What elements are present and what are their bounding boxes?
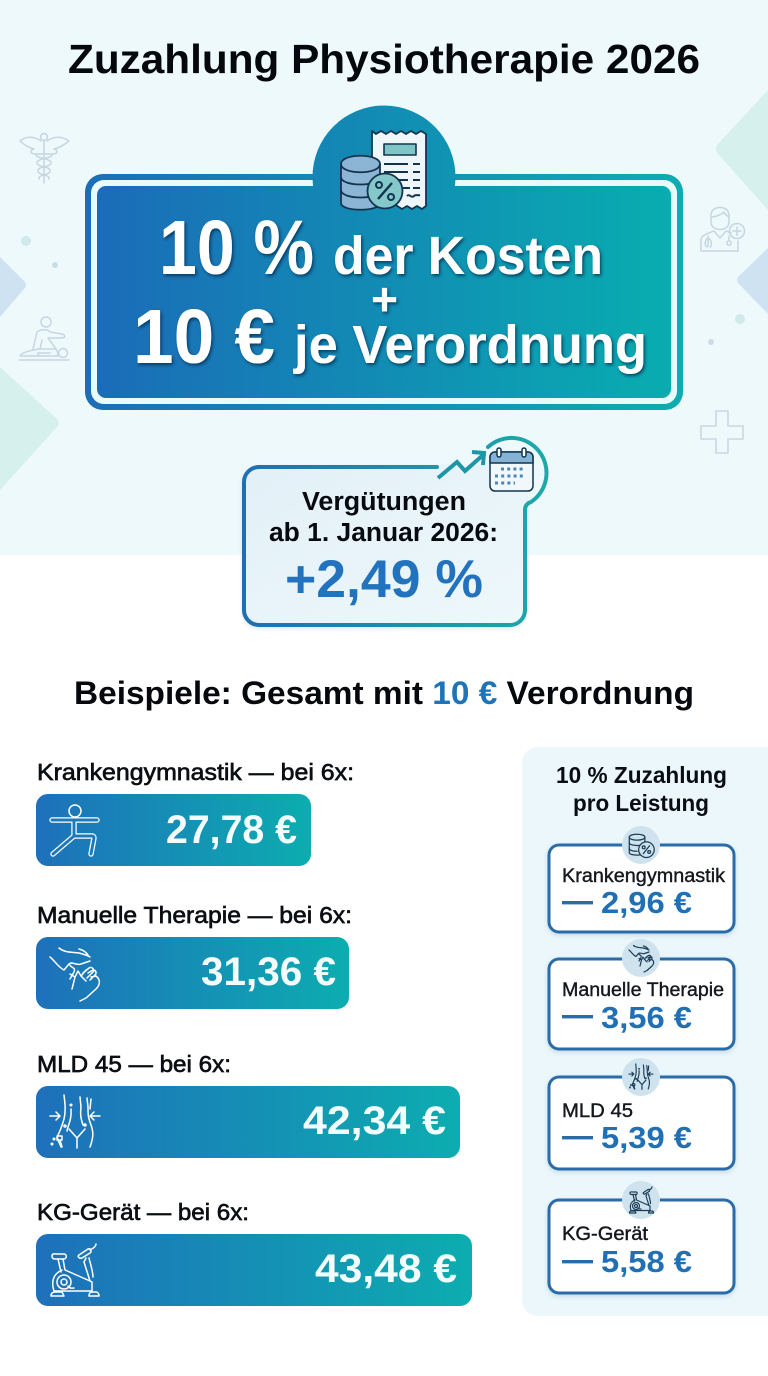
card: Krankengymnastik: Krankengymnastik <box>562 866 726 887</box>
icon: exercise bike <box>51 1244 99 1296</box>
hero text: 10 % <box>159 205 314 291</box>
row: Krankengymnastik: 27,78 € <box>166 808 297 852</box>
icon: coins <box>622 826 660 864</box>
callout: Vergütungen: +2,49 % <box>285 550 483 609</box>
card: MLD 45: MLD 45 <box>562 1101 633 1122</box>
title: Zuzahlung Physiotherapie 2026 <box>68 36 700 82</box>
callout: Vergütungen: ab 1. Januar 2026: <box>269 519 498 547</box>
card: KG-Gerät: 5,58 € <box>601 1244 692 1279</box>
card: KG-Gerät: KG-Gerät <box>562 1224 649 1245</box>
panel heading: pro Leistung <box>573 790 709 816</box>
row: Manuelle Therapie <box>36 902 352 1009</box>
card: Krankengymnastik <box>549 826 734 932</box>
row: Manuelle Therapie: 31,36 € <box>201 950 336 994</box>
hero text: + <box>371 273 398 325</box>
card: KG-Gerät <box>549 1181 734 1293</box>
icon: rising arrow <box>438 452 484 478</box>
card: MLD 45: 5,39 € <box>601 1120 692 1155</box>
row: MLD 45 <box>36 1051 460 1158</box>
panel: 10 % Zuzahlung <box>522 747 768 1316</box>
icon: doctor <box>701 208 744 251</box>
icon: receipt and coins <box>341 131 426 210</box>
heading: Beispiele: Beispiele: Gesamt mit 10 € Verordnung <box>74 675 694 711</box>
icon: body <box>622 1058 660 1096</box>
row: Krankengymnastik: Krankengymnastik — bei 6x: <box>37 759 354 785</box>
panel: hero box <box>85 106 683 410</box>
row: Krankengymnastik <box>36 759 354 866</box>
top background panel <box>0 0 768 555</box>
icon: cross <box>701 411 743 453</box>
icon: massage <box>19 317 69 360</box>
icon: hands <box>50 948 99 1001</box>
row: KG-Gerät: KG-Gerät — bei 6x: <box>37 1199 249 1225</box>
row: MLD 45: MLD 45 — bei 6x: <box>37 1051 231 1077</box>
row: KG-Gerät <box>36 1199 472 1306</box>
card: Krankengymnastik: 2,96 € <box>601 885 692 920</box>
row: MLD 45: 42,34 € <box>303 1099 446 1143</box>
callout text: Vergütungen <box>302 488 466 516</box>
card: Manuelle Therapie: 3,56 € <box>601 1000 692 1035</box>
row: KG-Gerät: 43,48 € <box>315 1247 457 1291</box>
card: Manuelle Therapie <box>549 939 734 1049</box>
icon: calendar <box>490 448 533 491</box>
icon: caduceus <box>20 134 69 183</box>
hero text <box>133 205 647 380</box>
callout: Vergütungen <box>243 438 547 626</box>
panel heading <box>556 762 727 816</box>
icon: bike <box>622 1181 660 1219</box>
panel heading: 10 % Zuzahlung <box>556 762 727 788</box>
hero text: je Verordnung <box>293 315 647 375</box>
card: MLD 45 <box>549 1058 734 1169</box>
icon: yoga figure <box>52 805 97 854</box>
icon: lymph drainage body <box>50 1095 100 1148</box>
row: Manuelle Therapie: Manuelle Therapie — bei 6x: <box>37 902 352 928</box>
card: Manuelle Therapie: Manuelle Therapie <box>562 980 724 1001</box>
icon: hands <box>622 939 660 977</box>
hero text: der Kosten <box>333 226 603 286</box>
hero text: 10 € <box>133 294 275 380</box>
